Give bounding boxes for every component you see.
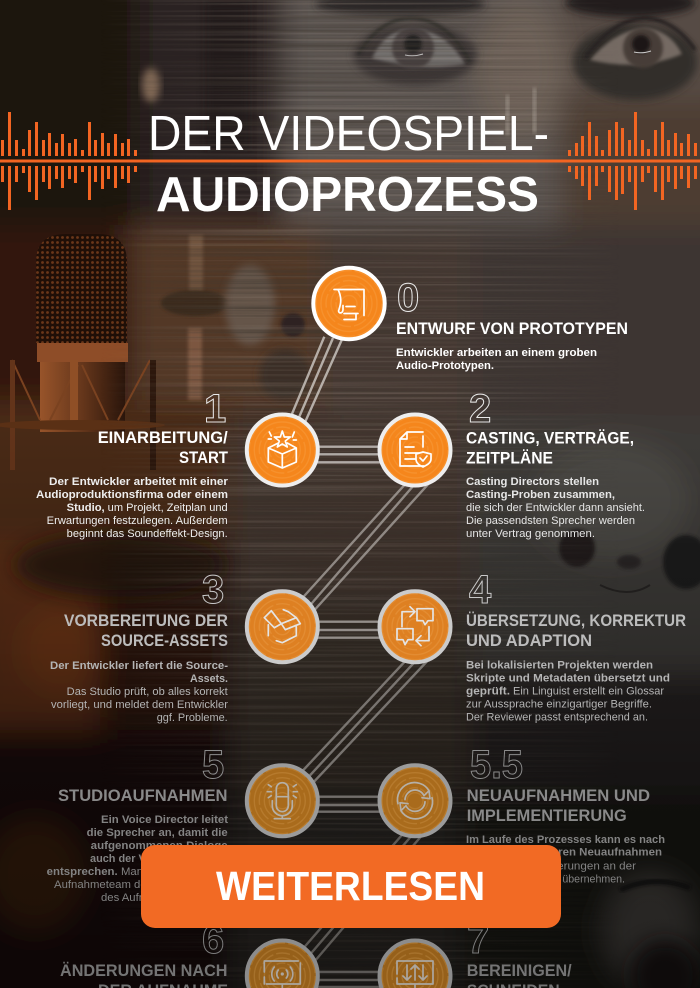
- body 1: Erwartungen festzulegen. Außerdem: [47, 515, 228, 527]
- heading 7: BEREINIGEN/: [467, 962, 572, 980]
- connector lines: [278, 337, 447, 987]
- heading 7: [467, 962, 572, 988]
- heading 6: [60, 962, 228, 988]
- body 5.5: [466, 834, 665, 885]
- body 1: Der Entwickler arbeitet mit einer: [49, 476, 229, 488]
- icon circle 0: [313, 268, 385, 339]
- heading 1: START: [179, 449, 228, 467]
- step 6: post-recording changes: [60, 918, 318, 988]
- body 3: [50, 660, 228, 724]
- step 1: onboarding: [36, 387, 318, 540]
- body 2: Casting-Proben zusammen,: [466, 489, 615, 501]
- body 3: vorliegt, und meldet dem Entwickler: [51, 699, 228, 711]
- body 5: auch der Vision des Spiels: [90, 853, 228, 865]
- title: [148, 107, 549, 222]
- body 5: [47, 814, 229, 904]
- body 2: die sich der Entwickler dann ansieht.: [466, 502, 645, 514]
- icon circle 4: [380, 591, 450, 662]
- icon circle 1: [247, 414, 318, 486]
- body 2: [466, 476, 645, 540]
- heading 3: SOURCE-ASSETS: [101, 632, 228, 650]
- heading 4: ÜBERSETZUNG, KORREKTUR: [466, 611, 686, 630]
- body 3: ggf. Probleme.: [157, 712, 228, 724]
- icon circle 2: [380, 414, 450, 486]
- step 4: translation: [380, 568, 686, 724]
- number 2: 2: [469, 387, 491, 431]
- heading 2: [466, 430, 634, 468]
- face eyes: [142, 0, 697, 150]
- body 1: Audioproduktionsfirma oder einem: [36, 489, 228, 501]
- heading 0: ENTWURF VON PROTOTYPEN: [396, 320, 628, 338]
- icon circle 5.5: [380, 765, 450, 836]
- heading 5.5: IMPLEMENTIERUNG: [467, 807, 627, 825]
- body 0: Entwickler arbeiten an einem groben: [396, 347, 597, 359]
- body 3: Das Studio prüft, ob alles korrekt: [67, 686, 228, 698]
- body 1: um Projekt, Zeitplan und: [108, 502, 228, 514]
- heading 1: [98, 429, 228, 467]
- heading 6: ÄNDERUNGEN NACH: [60, 962, 228, 980]
- body 5: die Sprecher an, damit die: [87, 827, 228, 839]
- heading 5.5: NEUAUFNAHMEN UND: [467, 787, 650, 805]
- heading 2: ZEITPLÄNE: [466, 450, 553, 468]
- body 3: Der Entwickler liefert die Source-: [50, 660, 228, 672]
- number 4: 4: [469, 568, 492, 612]
- heading 3: VORBEREITUNG DER: [64, 612, 228, 630]
- step 0: prototype draft: [313, 268, 628, 372]
- number 3: 3: [202, 568, 224, 612]
- body 2: Casting Directors stellen: [466, 476, 599, 488]
- title: AUDIOPROZESS: [156, 168, 539, 222]
- icon circle 7: [380, 940, 450, 988]
- heading 2: CASTING, VERTRÄGE,: [466, 430, 634, 448]
- body 2: unter Vertrag genommen.: [466, 528, 595, 540]
- number 6: 6: [202, 918, 224, 962]
- body 4: Der Reviewer passt entsprechend an.: [466, 712, 648, 724]
- creature and portrait details: [15, 529, 700, 988]
- icon circle 3: [247, 591, 318, 662]
- heading 5.5: [467, 787, 650, 825]
- body 5: Aufnahmeteam den Sitzungen bei,: [54, 879, 228, 891]
- body 5: des Aufnahmeprozesses.: [101, 892, 228, 904]
- body 4: geprüft.: [466, 686, 510, 698]
- step 2: casting: [380, 387, 645, 540]
- body 5: aufgenommenen Dialoge: [91, 840, 228, 852]
- body 1: [36, 476, 229, 540]
- title: DER VIDEOSPIEL-: [148, 107, 549, 161]
- header waveform left: [1, 112, 137, 210]
- icon circle 6: [247, 940, 318, 988]
- heading 1: EINARBEITUNG/: [98, 429, 228, 447]
- body 4: Bei lokalisierten Projekten werden: [466, 660, 653, 672]
- header waveform right: [568, 112, 697, 210]
- body 4: Ein Linguist erstellt ein Glossar: [513, 686, 664, 698]
- body 4: zur Aussprache einzigartiger Begriffe.: [466, 699, 652, 711]
- step 5: studio recording: [47, 743, 318, 904]
- body 5.5: Im Laufe des Prozesses kann es nach: [466, 834, 665, 846]
- heading 3: [64, 612, 228, 650]
- heading 4: [466, 611, 686, 650]
- body 5: Manchmal wohnt das: [121, 866, 229, 878]
- heading 4: UND ADAPTION: [466, 632, 592, 650]
- body 5: Ein Voice Director leitet: [101, 814, 228, 826]
- number 5.5: 5.5: [470, 743, 523, 787]
- body 5: entsprechen.: [47, 866, 118, 878]
- step 3: source assets: [50, 568, 318, 724]
- body 2: Die passendsten Sprecher werden: [466, 515, 635, 527]
- number 0: 0: [397, 276, 419, 320]
- read more button: [141, 845, 561, 928]
- body 0: Audio-Prototypen.: [396, 360, 494, 372]
- horizontal streak texture: [138, 0, 560, 987]
- step 7: cleaning and cutting: [380, 918, 572, 988]
- body 5.5: Wunsch zu weiteren Neuaufnahmen: [466, 846, 662, 858]
- body 0: [396, 347, 597, 372]
- heading 5: STUDIOAUFNAHMEN: [58, 787, 227, 805]
- number 5: 5: [202, 743, 224, 787]
- body 5.5: Implementierung zu übernehmen.: [466, 873, 625, 885]
- body 1: beginnt das Soundeffekt-Design.: [67, 528, 228, 540]
- body 4: Skripte und Metadaten übersetzt und: [466, 673, 670, 685]
- body 5.5: kommen, um Änderungen an der: [466, 860, 636, 872]
- number 7: 7: [467, 918, 489, 962]
- studio microphone: [0, 234, 311, 470]
- step 5.5: re-recording: [380, 743, 665, 885]
- icon circle 5: [247, 765, 318, 836]
- number 1: 1: [204, 387, 226, 431]
- body 3: Assets.: [190, 673, 228, 685]
- read more button: WEITERLESEN: [216, 863, 485, 909]
- body 1: Studio,: [67, 502, 105, 514]
- body 4: [466, 660, 670, 724]
